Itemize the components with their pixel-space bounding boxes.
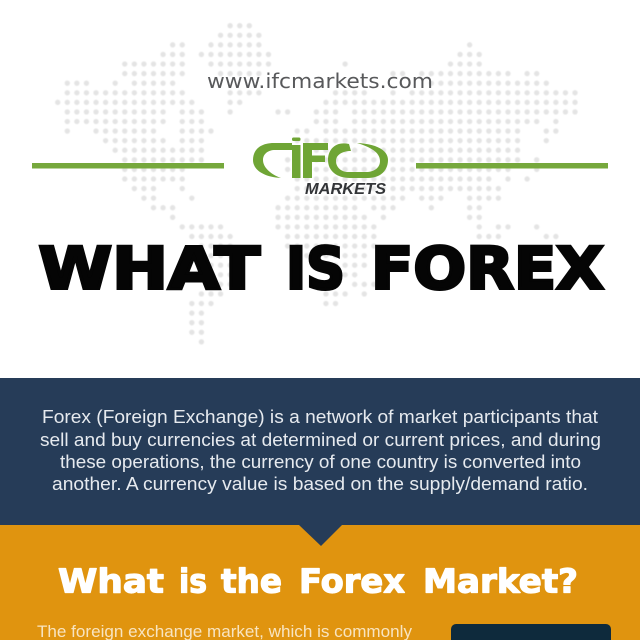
section heading: the: [221, 562, 282, 600]
definition text: another. A currency value is based on the supply/demand ratio.: [52, 473, 588, 494]
logo: IFC Markets: MARKETS: [305, 181, 387, 198]
pointer triangle: [299, 525, 342, 546]
definition text: [40, 406, 601, 494]
section heading: Market?: [423, 562, 578, 600]
definition text: these operations, the currency of one country is converted into: [60, 451, 581, 472]
section heading: Forex: [299, 562, 405, 600]
right green rule: [416, 163, 608, 168]
title: FOREX: [371, 234, 604, 302]
section heading: is: [179, 562, 207, 600]
title: IS: [286, 234, 345, 302]
section heading: What: [58, 562, 164, 600]
title: [38, 234, 604, 302]
panel: what is the forex market: [0, 525, 640, 640]
definition text: sell and buy currencies at determined or current prices, and during: [40, 429, 601, 450]
dark image card: [451, 624, 611, 640]
definition text: Forex (Foreign Exchange) is a network of market participants that: [42, 406, 598, 427]
website url: www.ifcmarkets.com: [207, 69, 433, 93]
panel: forex definition: [0, 378, 640, 525]
title: WHAT: [38, 234, 260, 302]
section heading: [58, 562, 578, 600]
logo: IFC Markets: [253, 138, 388, 198]
left green rule: [32, 163, 224, 168]
background: dotted world map: [58, 26, 575, 342]
